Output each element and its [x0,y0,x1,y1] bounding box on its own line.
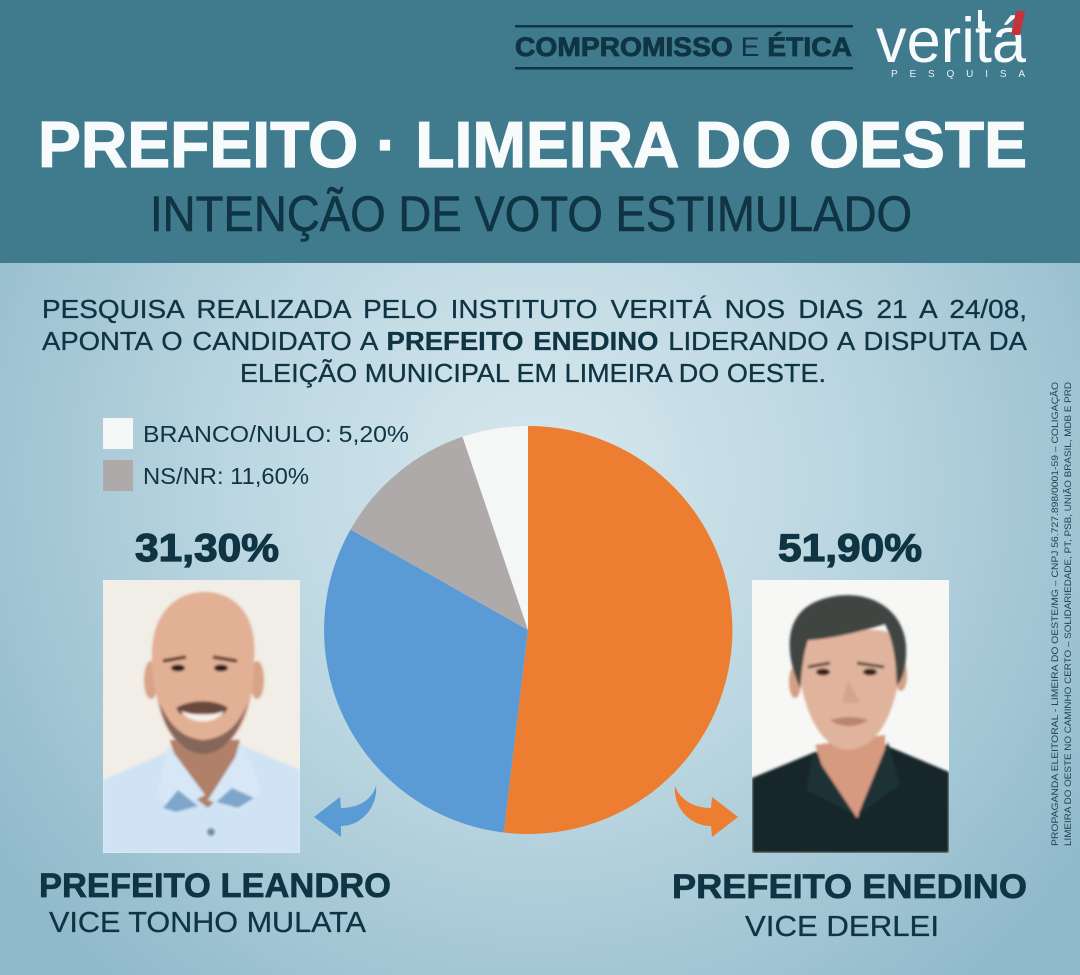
intro text block [42,294,1028,388]
header band [0,0,1080,263]
intro text block: PESQUISA REALIZADA PELO INSTITUTO VERITÁ NOS DIAS 21 A 24/08, [42,294,1027,324]
percent: enedino: 51,90% [778,527,922,570]
legend: BRANCO/NULO: 5,20% [143,421,409,447]
portrait: leandro [103,580,300,853]
arrow: blue pointing to leandro [314,786,376,837]
percent: leandro: 31,30% [135,527,279,570]
candidate name: leandro: PREFEITO LEANDRO [39,867,391,905]
candidate name: enedino: PREFEITO ENEDINO [672,868,1027,906]
title: PREFEITO · LIMEIRA DO OESTE [38,108,1027,181]
candidate name: leandro [39,867,391,939]
legal note [1050,382,1074,846]
legal note: LIMEIRA DO OESTE NO CAMINHO CERTO – SOLIDARIEDADE, PT, PSB, UNIÃO BRASIL, MDB E PRD [1063,382,1074,846]
pie chart [324,426,732,834]
candidate name: leandro: VICE TONHO MULATA [49,907,367,939]
arrow: orange pointing to enedino [675,786,738,837]
portrait: enedino [752,580,949,853]
subtitle: INTENÇÃO DE VOTO ESTIMULADO [150,186,912,242]
legend: NS/NR: 11,60% [143,463,309,489]
logo: veritá pesquisa: veritá [876,6,1027,76]
legend [103,418,409,491]
intro text block: APONTA O CANDIDATO A PREFEITO ENEDINO LIDERANDO A DISPUTA DA [42,326,1028,356]
slogan: compromisso e ética: COMPROMISSO E ÉTICA [515,31,852,62]
legal note: PROPAGANDA ELEITORAL - LIMEIRA DO OESTE/MG – CNPJ 56.727.898/0001-59 – COLIGAÇÃO [1050,382,1061,846]
candidate name: enedino: VICE DERLEI [745,911,939,943]
intro text block: ELEIÇÃO MUNICIPAL EM LIMEIRA DO OESTE. [240,358,826,388]
logo: veritá pesquisa: PESQUISA [891,69,1025,80]
candidate name: enedino [672,868,1027,943]
